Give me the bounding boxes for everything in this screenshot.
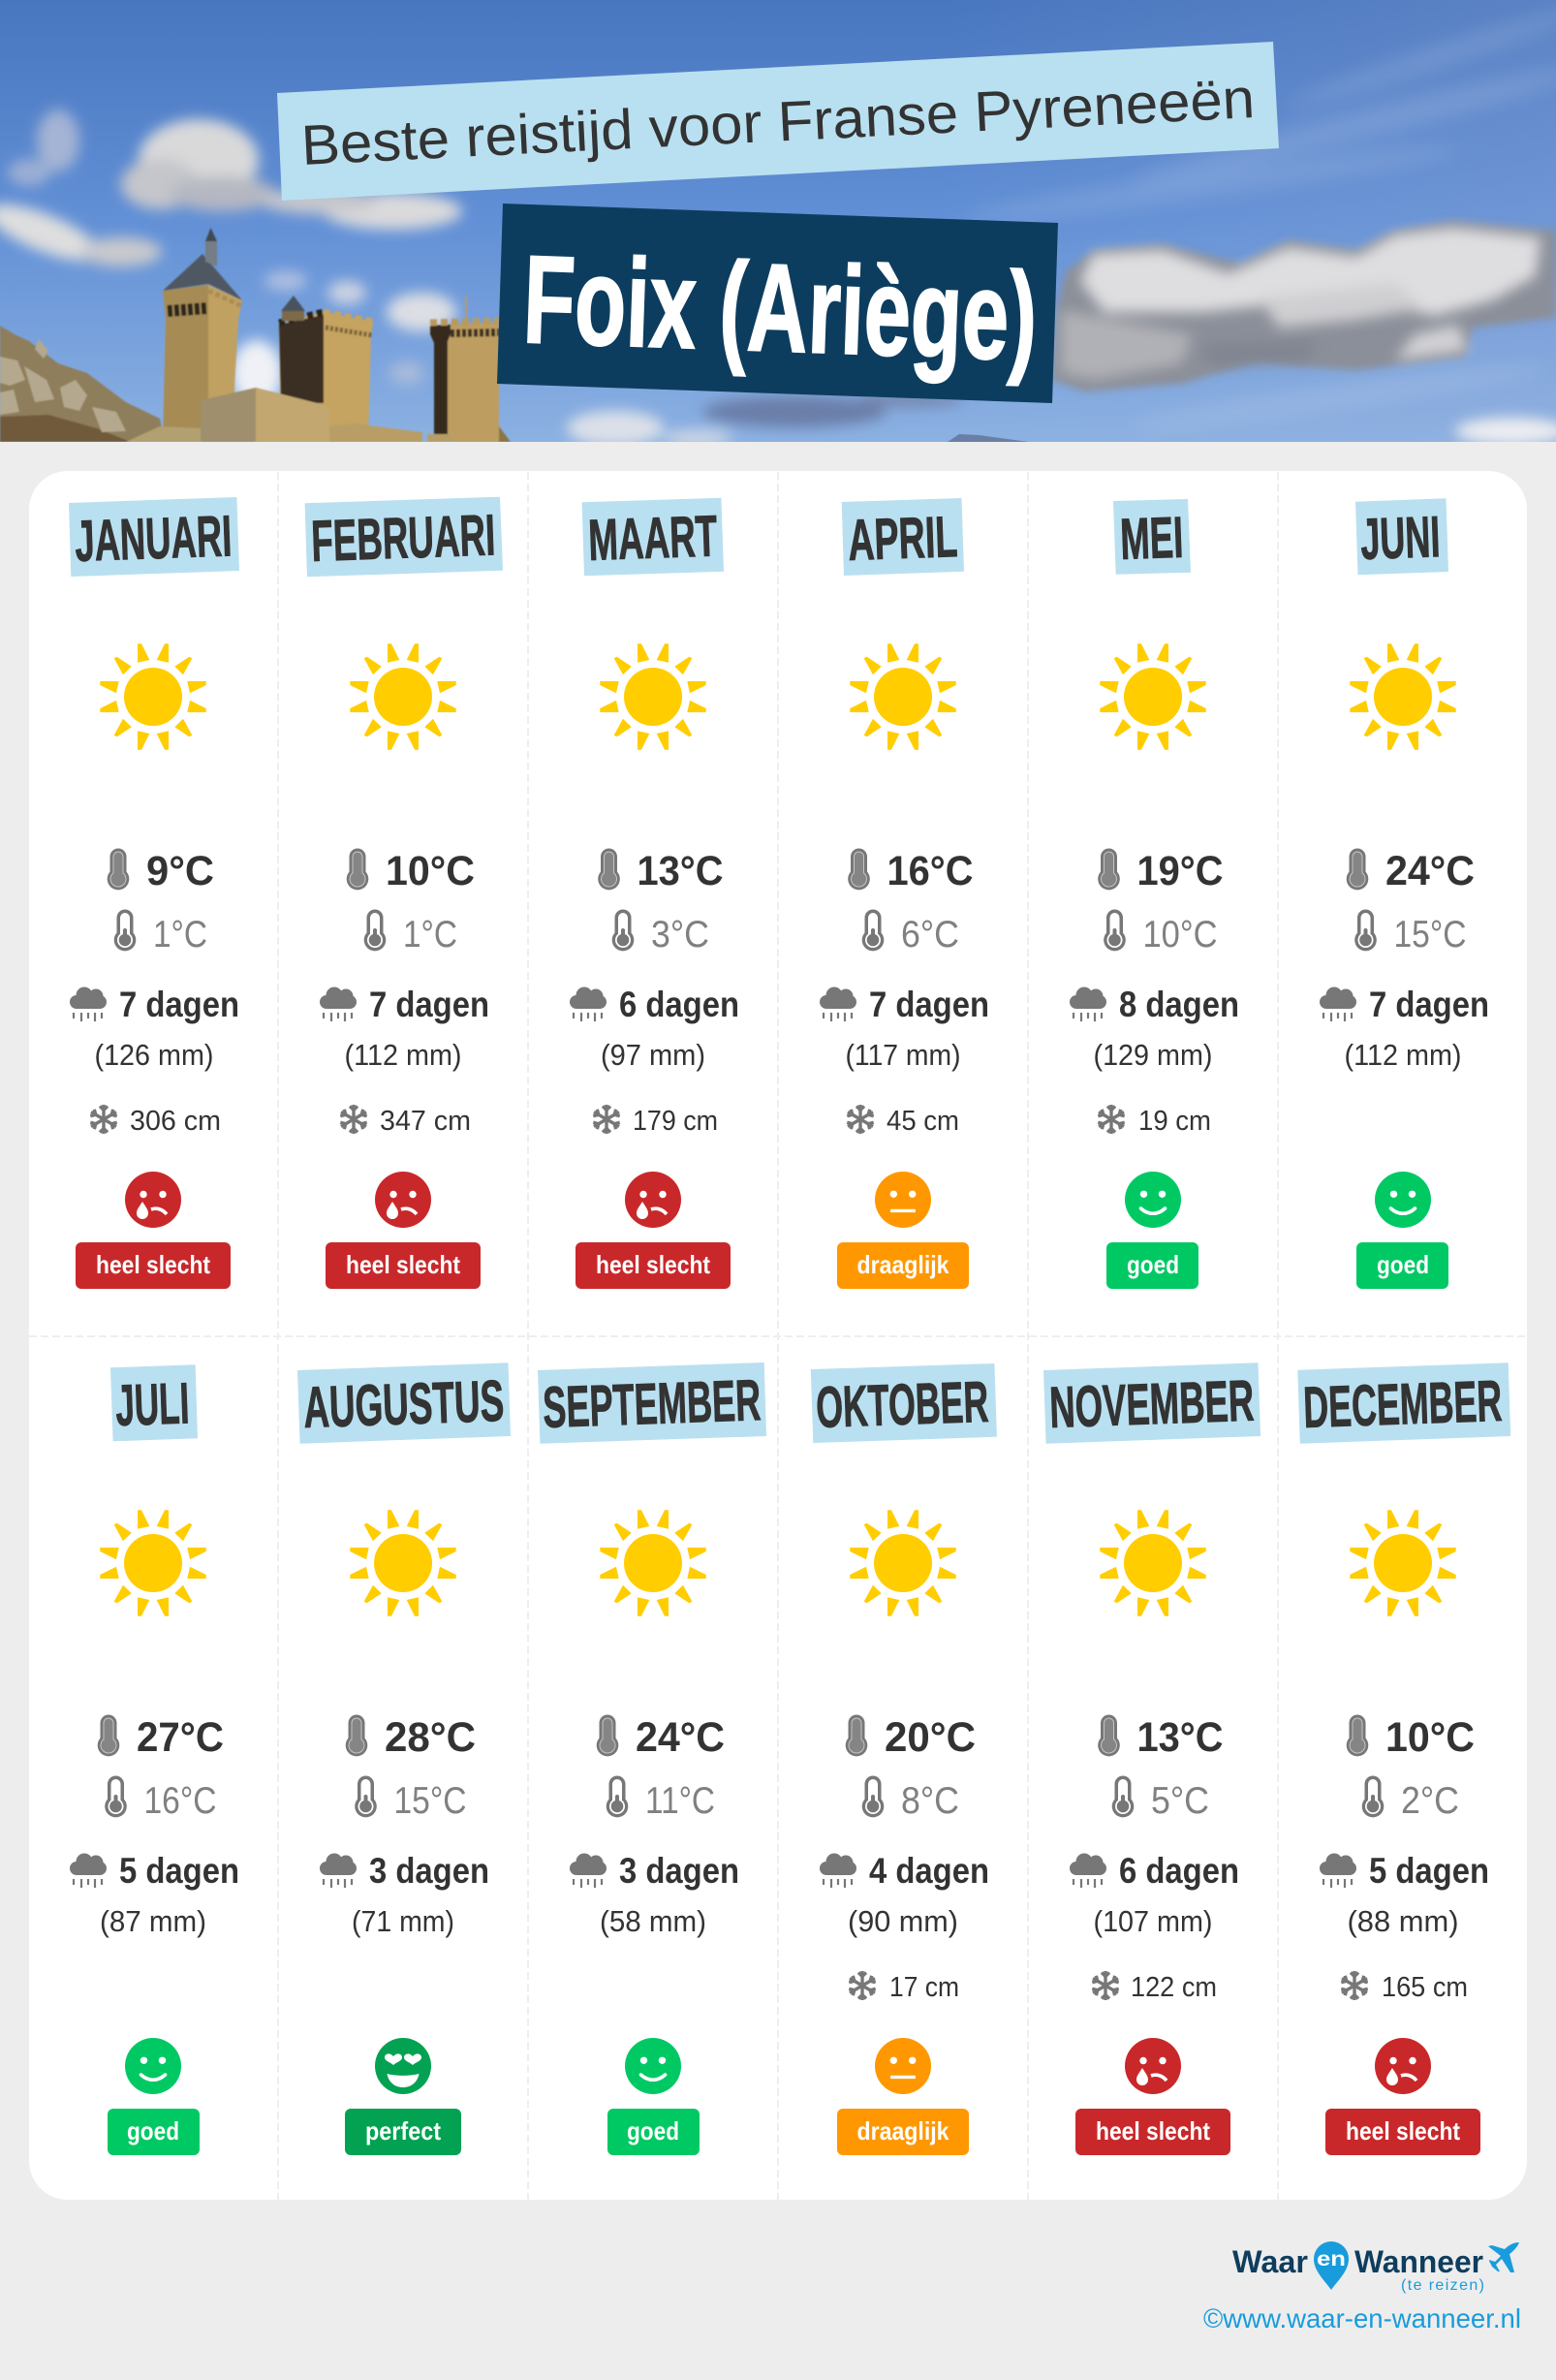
tower 1 (163, 284, 243, 412)
city heading (497, 204, 1058, 403)
rating badge: perfect (365, 2116, 441, 2145)
logo: Waar en Wanneer: Wanneer (1354, 2244, 1483, 2279)
rain days: 3 dagen (619, 1851, 739, 1891)
max temperature: 19°C (1137, 848, 1223, 894)
rain days (820, 985, 989, 1024)
max temperature: 13°C (1137, 1714, 1223, 1761)
min temperature (355, 1775, 467, 1822)
month label: januari: JANUARI (74, 503, 233, 574)
min temperature: 5°C (1151, 1780, 1209, 1822)
rain days: 7 dagen (119, 985, 239, 1024)
panel: mei (1070, 499, 1239, 1289)
icon: rating face (125, 1172, 181, 1228)
tower 2 (279, 312, 374, 442)
panel: januari (69, 497, 239, 1289)
city heading: Foix (Ariège) (521, 230, 1040, 387)
rainfall: (117 mm) (845, 1038, 961, 1072)
rain days: 6 dagen (619, 985, 739, 1024)
rating badge: draaglijk (856, 2116, 949, 2145)
min temperature (607, 1775, 715, 1822)
max temperature: 16°C (887, 848, 973, 894)
icon: rating face (1375, 2038, 1431, 2094)
snowfall (592, 1105, 718, 1137)
panel: maart (570, 498, 739, 1289)
rating badge (1075, 2109, 1230, 2155)
month label: mei (1113, 499, 1191, 575)
month label: maart (582, 498, 724, 576)
rain days (1070, 1851, 1239, 1891)
month label: oktober: OKTOBER (815, 1369, 989, 1440)
rating badge: goed (1127, 1250, 1179, 1279)
month label: juni: JUNI (1359, 504, 1441, 572)
rain days: 3 dagen (369, 1851, 489, 1891)
rating badge (345, 2109, 461, 2155)
icon: sun (100, 643, 206, 750)
rain days (320, 1851, 489, 1891)
icon: sun (1100, 1510, 1206, 1616)
min temperature: 8°C (901, 1780, 959, 1822)
min temperature (1104, 909, 1217, 955)
castle walls (200, 387, 258, 442)
snowfall (89, 1105, 221, 1137)
snowfall (1340, 1971, 1468, 2003)
snowfall: 122 cm (1131, 1972, 1217, 2003)
rain days (570, 1851, 739, 1891)
rain days: 7 dagen (369, 985, 489, 1024)
max temperature: 24°C (1385, 848, 1475, 894)
title banner (277, 42, 1279, 201)
icon: sun (600, 643, 706, 750)
logo: Waar en Wanneer (1232, 2241, 1519, 2294)
min temperature: 1°C (153, 914, 207, 955)
max temperature (108, 848, 214, 894)
rating badge: goed (627, 2116, 679, 2145)
rain days (1070, 985, 1239, 1024)
rating badge (1325, 2109, 1480, 2155)
rain days (1320, 1851, 1489, 1891)
min temperature: 3°C (651, 914, 709, 955)
max temperature: 10°C (386, 848, 475, 894)
min temperature: 6°C (901, 914, 959, 955)
rain days: 8 dagen (1119, 985, 1239, 1024)
max temperature (848, 848, 973, 894)
rainfall: (71 mm) (352, 1904, 454, 1938)
month label: juli: JULI (114, 1370, 190, 1438)
rating badge: heel slecht (346, 1250, 460, 1279)
month label: februari: FEBRUARI (310, 502, 496, 574)
min temperature (105, 1775, 217, 1822)
rating badge: heel slecht (596, 1250, 710, 1279)
rating badge (1356, 1242, 1448, 1289)
panel: juli (70, 1364, 239, 2155)
month label: maart: MAART (587, 503, 718, 573)
icon: sun (100, 1510, 206, 1616)
icon: rating face (1125, 2038, 1181, 2094)
max temperature (1347, 1714, 1475, 1761)
min temperature (114, 909, 207, 955)
snowfall: 306 cm (130, 1106, 221, 1137)
max temperature (347, 848, 475, 894)
icon: sun (850, 1510, 956, 1616)
rainfall: (107 mm) (1093, 1904, 1213, 1938)
panel: juni (1320, 498, 1489, 1289)
month label: februari (305, 497, 503, 577)
rain days (70, 1851, 239, 1891)
max temperature: 9°C (146, 848, 214, 894)
max temperature (98, 1714, 224, 1761)
icon: sun (350, 1510, 456, 1616)
rain days (570, 985, 739, 1024)
icon: sun (850, 643, 956, 750)
copyright url: ©www.waar-en-wanneer.nl (1203, 2303, 1521, 2333)
month label: augustus (297, 1362, 511, 1444)
rating badge: heel slecht (1096, 2116, 1210, 2145)
snowfall (339, 1105, 471, 1137)
max temperature (346, 1714, 476, 1761)
icon: rating face (875, 1172, 931, 1228)
rating badge (108, 2109, 200, 2155)
rain days: 7 dagen (1369, 985, 1489, 1024)
rating badge: goed (1377, 1250, 1429, 1279)
min temperature: 10°C (1143, 914, 1217, 955)
max temperature (1098, 1714, 1223, 1761)
icon: sun (1350, 1510, 1456, 1616)
month label: januari (69, 497, 239, 577)
rain days: 5 dagen (1369, 1851, 1489, 1891)
panel: augustus (297, 1362, 511, 2155)
snowfall (1097, 1105, 1211, 1137)
rating badge (837, 1242, 969, 1289)
month label: augustus: AUGUSTUS (302, 1368, 505, 1440)
max temperature: 27°C (137, 1714, 224, 1761)
month label: september (538, 1362, 766, 1444)
min temperature (1112, 1775, 1209, 1822)
rating badge: draaglijk (856, 1250, 949, 1279)
panel: november (1043, 1362, 1260, 2155)
min temperature (1354, 909, 1467, 955)
month label: april (842, 498, 964, 576)
rating badge (76, 1242, 231, 1289)
rain days (820, 1851, 989, 1891)
max temperature (597, 1714, 725, 1761)
title banner: Beste reistijd voor Franse Pyreneeën (299, 67, 1256, 177)
min temperature: 2°C (1401, 1780, 1459, 1822)
icon: rating face (125, 2038, 181, 2094)
icon: sun (350, 643, 456, 750)
snowfall: 347 cm (380, 1106, 471, 1137)
header photo: sky with clouds and Foix castle (0, 0, 1556, 446)
rain days: 4 dagen (869, 1851, 989, 1891)
logo: Waar en Wanneer: Waar (1232, 2244, 1308, 2279)
rain days: 7 dagen (869, 985, 989, 1024)
icon: rating face (1375, 1172, 1431, 1228)
snowfall: 165 cm (1382, 1972, 1468, 2003)
max temperature: 28°C (385, 1714, 476, 1761)
icon: sun (600, 1510, 706, 1616)
rainfall: (58 mm) (600, 1904, 706, 1938)
rainfall: (129 mm) (1093, 1038, 1213, 1072)
max temperature: 10°C (1385, 1714, 1475, 1761)
tower 3 (430, 322, 499, 442)
min temperature: 1°C (403, 914, 457, 955)
rating badge: heel slecht (1346, 2116, 1460, 2145)
rain days (320, 985, 489, 1024)
panel: monthly climate card (29, 471, 1527, 2200)
hillside (0, 326, 165, 442)
rating badge: goed (127, 2116, 179, 2145)
min temperature: 16°C (143, 1780, 217, 1822)
rating badge (326, 1242, 481, 1289)
panel: april (820, 498, 989, 1289)
icon: rating face (625, 2038, 681, 2094)
rain days: 6 dagen (1119, 1851, 1239, 1891)
month label: april: APRIL (847, 504, 958, 573)
rating badge: heel slecht (96, 1250, 210, 1279)
rain days (70, 985, 239, 1024)
month label: mei: MEI (1119, 505, 1184, 572)
month label: september: SEPTEMBER (542, 1367, 762, 1440)
rainfall: (112 mm) (1345, 1038, 1461, 1072)
icon: rating face (625, 1172, 681, 1228)
max temperature (598, 848, 723, 894)
snowfall: 45 cm (887, 1106, 959, 1137)
max temperature (1347, 848, 1475, 894)
month label: november: NOVEMBER (1048, 1368, 1255, 1440)
rainfall: (88 mm) (1347, 1904, 1459, 1938)
panel: oktober (811, 1363, 997, 2155)
rainfall: (126 mm) (95, 1038, 213, 1072)
rating badge (837, 2109, 969, 2155)
icon: rating face (875, 2038, 931, 2094)
min temperature (364, 909, 457, 955)
icon: rating face (1125, 1172, 1181, 1228)
icon: sun (1100, 643, 1206, 750)
snowfall (846, 1105, 959, 1137)
month label: juli (110, 1364, 198, 1441)
icon: airplane (1488, 2242, 1519, 2272)
icon: sun (1350, 643, 1456, 750)
snowfall: 19 cm (1138, 1106, 1211, 1137)
min temperature: 15°C (1393, 914, 1467, 955)
rainfall: (90 mm) (848, 1904, 958, 1938)
logo: Waar en Wanneer: (te reizen) (1401, 2277, 1484, 2294)
rain days: 5 dagen (119, 1851, 239, 1891)
max temperature: 13°C (638, 848, 723, 894)
rainfall: (87 mm) (100, 1904, 206, 1938)
max temperature: 20°C (885, 1714, 976, 1761)
rain days (1320, 985, 1489, 1024)
rainfall: (97 mm) (601, 1038, 705, 1072)
min temperature: 11°C (645, 1780, 715, 1822)
min temperature (862, 1775, 959, 1822)
icon: rating face (375, 1172, 431, 1228)
max temperature (1098, 848, 1223, 894)
rating badge (576, 1242, 731, 1289)
min temperature (862, 909, 959, 955)
panel: februari (305, 497, 503, 1289)
min temperature (1362, 1775, 1459, 1822)
min temperature: 15°C (393, 1780, 467, 1822)
panel: december (1297, 1362, 1510, 2155)
snowfall: 17 cm (889, 1972, 959, 2003)
rating badge (1106, 1242, 1198, 1289)
max temperature: 24°C (636, 1714, 725, 1761)
panel: september (538, 1362, 766, 2155)
rainfall: (112 mm) (345, 1038, 461, 1072)
min temperature (612, 909, 709, 955)
icon: rating face (375, 2038, 431, 2094)
max temperature (846, 1714, 976, 1761)
month label: oktober (811, 1363, 997, 1443)
snowfall: 179 cm (633, 1106, 718, 1137)
month label: november (1043, 1362, 1260, 1444)
snowfall (1091, 1971, 1217, 2003)
month label: juni (1355, 498, 1448, 575)
icon: map pin (1314, 2241, 1349, 2290)
rating badge (607, 2109, 700, 2155)
icon: map pin: en (1317, 2248, 1346, 2270)
snowfall (848, 1971, 959, 2003)
